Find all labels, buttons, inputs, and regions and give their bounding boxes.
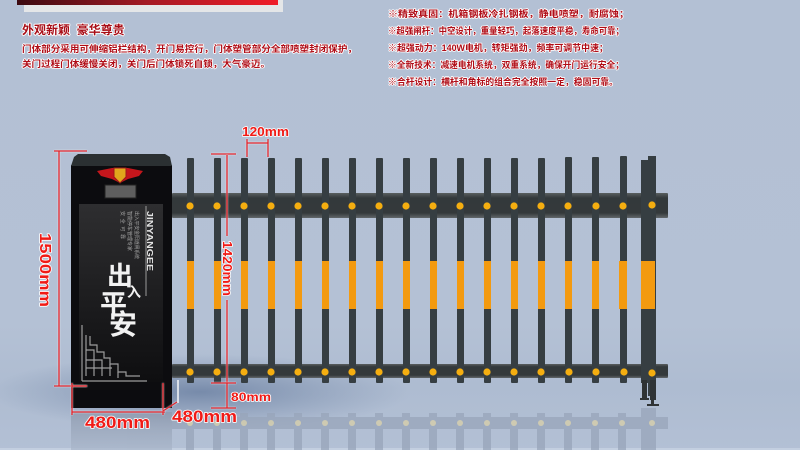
feature list: ※超强闸杆：中空设计，重量轻巧，起落速度平稳，寿命可靠； xyxy=(388,25,624,37)
dimension: 1420mm picket height: 1420mm xyxy=(220,241,235,296)
description text: 关门过程门体缓慢关闭，关门后门体锁死自锁，大气豪迈。 xyxy=(22,58,270,69)
rivets xyxy=(186,201,656,377)
dimension: 120mm spacing: 120mm xyxy=(242,124,289,139)
top red banner xyxy=(17,0,283,12)
fence barrier arm xyxy=(172,156,668,406)
dimension: 1500mm height: 1500mm xyxy=(36,233,53,307)
dimension: 80mm clearance: 80mm xyxy=(231,390,271,404)
small slogan lines xyxy=(119,211,140,259)
lower rail xyxy=(172,364,668,378)
dimension: 480mm depth: 480mm xyxy=(172,407,237,426)
feature list: ※超强动力：140W电机，转矩强劲，频率可调节中速； xyxy=(388,42,608,54)
dimension: 1500mm height xyxy=(36,151,87,386)
support feet xyxy=(640,380,659,406)
vertical brand text: JINYANGEE xyxy=(145,211,155,271)
small slogan lines: 出入平安金阳道闸系统 xyxy=(133,211,140,259)
dimension: 480mm width: 480mm xyxy=(85,413,150,432)
upper rail xyxy=(172,193,668,218)
dimension: 480mm width xyxy=(72,383,165,432)
cabinet top cap xyxy=(71,154,172,166)
description text xyxy=(22,43,357,69)
calligraphy slogan: 出 xyxy=(107,261,133,291)
name plate xyxy=(105,185,136,198)
dimension: 480mm depth xyxy=(163,380,237,426)
feature list: ※精致真固：机箱钢板冷扎钢板，静电喷塑，耐腐蚀； xyxy=(388,8,629,20)
vertical pickets xyxy=(187,156,656,396)
red wing emblem xyxy=(97,168,143,183)
feature list xyxy=(388,8,629,87)
barrier cabinet xyxy=(71,154,172,408)
feature list: ※全新技术：减速电机系统，双重系统，确保开门运行安全； xyxy=(388,59,624,71)
calligraphy slogan: 平 xyxy=(100,290,127,320)
corner lattice ornament xyxy=(82,325,147,381)
floor reflection xyxy=(71,408,668,450)
calligraphy slogan: 安 xyxy=(109,309,137,340)
calligraphy slogan xyxy=(100,261,141,340)
graphic panel xyxy=(79,204,163,382)
small slogan lines: 智能停车管理专家 xyxy=(126,211,133,251)
calligraphy slogan: 入 xyxy=(127,284,141,300)
small slogan lines: 安全可靠 xyxy=(119,211,126,239)
heading: appearance: 外观新颖 豪华尊贵 xyxy=(22,22,125,37)
description text: 门体部分采用可伸缩铝栏结构，开门易控行，门体塑管部分全部喷塑封闭保护， xyxy=(22,43,357,54)
dimension: 120mm spacing xyxy=(242,124,289,157)
dimension: 80mm clearance xyxy=(211,383,271,408)
orange reflective bands xyxy=(187,261,655,309)
feature list: ※合杆设计：横杆和角标的组合完全按照一定，稳固可靠。 xyxy=(388,76,618,87)
